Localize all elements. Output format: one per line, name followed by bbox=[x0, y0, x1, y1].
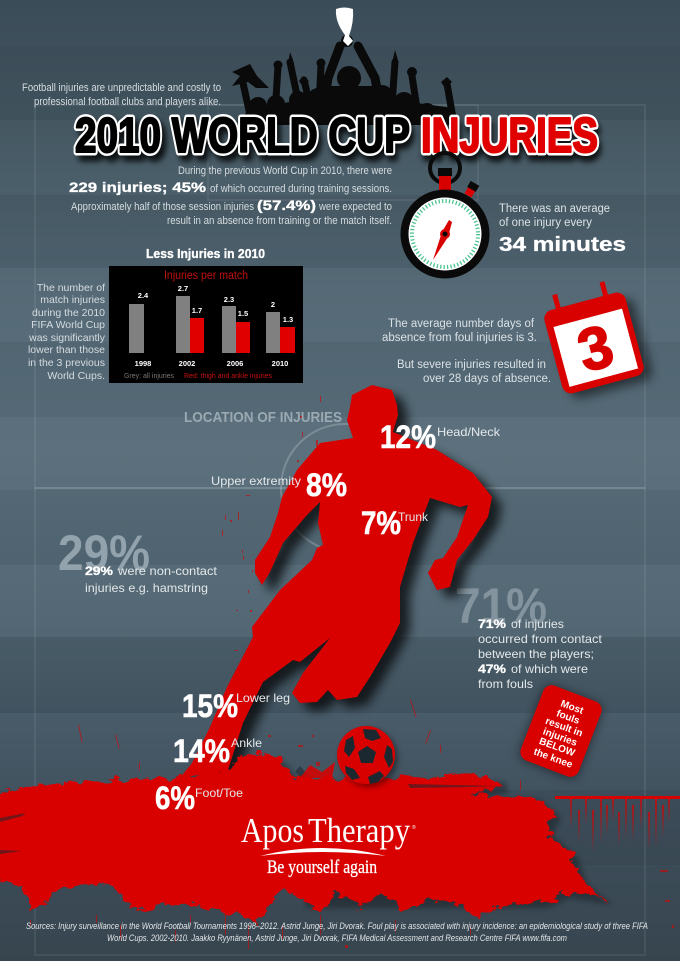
logo: ApoTherapy bbox=[241, 811, 416, 878]
logo: ApoTherapy: ® bbox=[412, 824, 416, 831]
text block: one injury every 34 minutes bbox=[499, 203, 626, 256]
callout: red card: the knee bbox=[532, 747, 574, 771]
sources bbox=[26, 921, 648, 943]
logo: ApoTherapy: Apos bbox=[241, 811, 304, 850]
percent label: head and neck bbox=[380, 419, 501, 455]
big stat: 71 percent: of injuries bbox=[511, 617, 564, 631]
text block: absence days: The average number days of bbox=[388, 318, 535, 330]
text block: training session stats: During the previous World Cup in 2010, there were bbox=[178, 165, 392, 177]
sources: World Cups. 2002-2010. Jaakko Ryynänen, Astrid Junge, Jiri Dvorak, FIFA Medical Assessment and Research Centre FIFA www.fifa.com bbox=[107, 933, 567, 943]
text block: absence days: over 28 days of absence. bbox=[423, 373, 551, 385]
icon: trophy bbox=[336, 8, 353, 46]
percent label: upper extremity: Upper extremity bbox=[211, 474, 301, 488]
text block: training session stats: (57.4%) bbox=[257, 197, 316, 213]
callout: red card: Most bbox=[559, 698, 585, 717]
text block: one injury every 34 minutes: There was an average bbox=[499, 203, 610, 215]
illustration: crowd silhouette with trophy bbox=[232, 8, 458, 125]
percent label: ankle: 14% bbox=[173, 733, 230, 769]
bar chart: injuries per match: 1.3 bbox=[283, 315, 293, 324]
text block: training session stats: Approximately half of those session injuries bbox=[71, 201, 254, 213]
callout: red card: result in bbox=[544, 716, 584, 739]
text block: one injury every 34 minutes: 34 minutes bbox=[499, 234, 626, 256]
percent label: foot and toe: 6% bbox=[155, 780, 195, 816]
callout: red card bbox=[517, 683, 604, 780]
big stat: 71 percent: between the players; bbox=[478, 647, 594, 661]
bar chart: injuries per match: 2002 bbox=[179, 359, 195, 368]
text block: chart description: lower than those bbox=[28, 344, 105, 356]
big stat: 71 percent: of which were bbox=[511, 662, 588, 676]
callout: red card: fouls bbox=[555, 708, 581, 727]
big stat: 71 percent bbox=[455, 578, 603, 691]
bar chart: injuries per match: 2006 bbox=[227, 359, 243, 368]
percent label: foot and toe: Foot/Toe bbox=[195, 786, 243, 800]
bar chart: injuries per match: 2.4 bbox=[138, 291, 149, 300]
text block: training session stats bbox=[69, 165, 392, 227]
callout: red card: injuries bbox=[541, 726, 579, 749]
big stat: 71 percent: 71% bbox=[455, 578, 547, 634]
big stat: 71 percent: from fouls bbox=[478, 677, 533, 691]
percent label: trunk: 7% bbox=[361, 505, 401, 541]
text block: training session stats: 229 injuries; 45% bbox=[69, 179, 207, 195]
title: 2010 WORLD CUP bbox=[75, 109, 410, 163]
percent label: upper extremity bbox=[211, 467, 347, 503]
bar chart: injuries per match: 1.5 bbox=[238, 309, 248, 318]
title: INJURIES bbox=[421, 109, 598, 163]
heading: location of injuries: LOCATION OF INJURIES bbox=[184, 409, 342, 426]
bar chart: injuries per match: 2.7 bbox=[178, 284, 188, 293]
bar chart: injuries per match: 2 bbox=[271, 300, 275, 309]
bar chart: injuries per match: Injuries per match bbox=[164, 270, 248, 282]
bar chart: injuries per match: 2.3 bbox=[224, 295, 234, 304]
percent label: head and neck: Head/Neck bbox=[437, 425, 501, 439]
percent label: trunk: Trunk bbox=[398, 510, 429, 524]
big stat: 29 percent: were non-contact bbox=[117, 564, 218, 578]
title: INJURIES bbox=[421, 109, 598, 163]
big stat: 29 percent: injuries e.g. hamstring bbox=[85, 581, 208, 595]
percent label: ankle: Ankle bbox=[231, 736, 262, 750]
big stat: 29 percent: 29% bbox=[85, 566, 113, 578]
icon: stopwatch bbox=[400, 153, 490, 278]
text block: training session stats: of which occurred during training sessions. bbox=[210, 183, 392, 195]
bar chart: injuries per match bbox=[109, 266, 303, 383]
bar chart: injuries per match: Grey: all injuries bbox=[124, 373, 174, 380]
percent label: trunk bbox=[361, 505, 429, 541]
percent label: lower leg: Lower leg bbox=[236, 691, 290, 705]
text block: chart description: FIFA World Cup bbox=[31, 319, 105, 331]
big stat: 71 percent: occurred from contact bbox=[478, 632, 603, 646]
callout: red card: BELOW bbox=[537, 736, 577, 759]
intro text bbox=[22, 82, 221, 108]
percent label: lower leg: 15% bbox=[182, 688, 238, 724]
title: 2010 WORLD CUP bbox=[75, 109, 410, 163]
text block: absence days: But severe injuries resulted in bbox=[397, 359, 546, 371]
big stat: 71 percent: 47% bbox=[478, 664, 506, 676]
icon: calendar bbox=[539, 275, 654, 402]
big stat: 71 percent: 71% bbox=[478, 619, 506, 631]
big stat: 29 percent bbox=[58, 525, 218, 595]
text block: chart description: World Cups. bbox=[47, 370, 105, 382]
percent label: upper extremity: 8% bbox=[306, 467, 347, 503]
heading: less injuries in 2010: Less Injuries in 2010 bbox=[146, 246, 265, 261]
text block: chart description: match injuries bbox=[40, 294, 105, 306]
logo: ApoTherapy: Therapy bbox=[308, 811, 410, 850]
illustration: football bbox=[337, 726, 398, 787]
bar chart: injuries per match: 1.7 bbox=[192, 306, 202, 315]
illustration: red paint splash bbox=[0, 396, 680, 949]
percent label: lower leg bbox=[182, 688, 290, 724]
bar chart: injuries per match: 2010 bbox=[272, 359, 288, 368]
percent label: foot and toe bbox=[155, 780, 243, 816]
text block: absence days bbox=[382, 318, 551, 385]
text block: chart description: during the 2010 bbox=[32, 307, 105, 319]
intro text: Football injuries are unpredictable and costly to bbox=[22, 82, 221, 94]
text block: chart description: was significantly bbox=[28, 332, 106, 344]
intro text: professional football clubs and players alike. bbox=[34, 96, 221, 108]
logo: ApoTherapy: Be yourself again bbox=[267, 857, 377, 878]
big stat: 29 percent: 29% bbox=[58, 525, 150, 581]
text block: one injury every 34 minutes: of one injury every bbox=[499, 217, 592, 229]
illustration: player silhouette bbox=[180, 385, 502, 786]
text block: chart description: in the 3 previous bbox=[28, 357, 105, 369]
text block: absence days: absence from foul injuries is 3. bbox=[382, 332, 537, 344]
text block: chart description: The number of bbox=[37, 282, 105, 294]
text block: training session stats: were expected to bbox=[318, 201, 392, 213]
icon: calendar: 3 bbox=[571, 312, 620, 385]
percent label: head and neck: 12% bbox=[380, 419, 436, 455]
bar chart: injuries per match: 1998 bbox=[135, 359, 151, 368]
text block: chart description bbox=[28, 282, 106, 382]
bar chart: injuries per match: Red: thigh and ankle injuries bbox=[184, 373, 272, 380]
text block: training session stats: result in an absence from training or the match itself. bbox=[167, 215, 392, 227]
